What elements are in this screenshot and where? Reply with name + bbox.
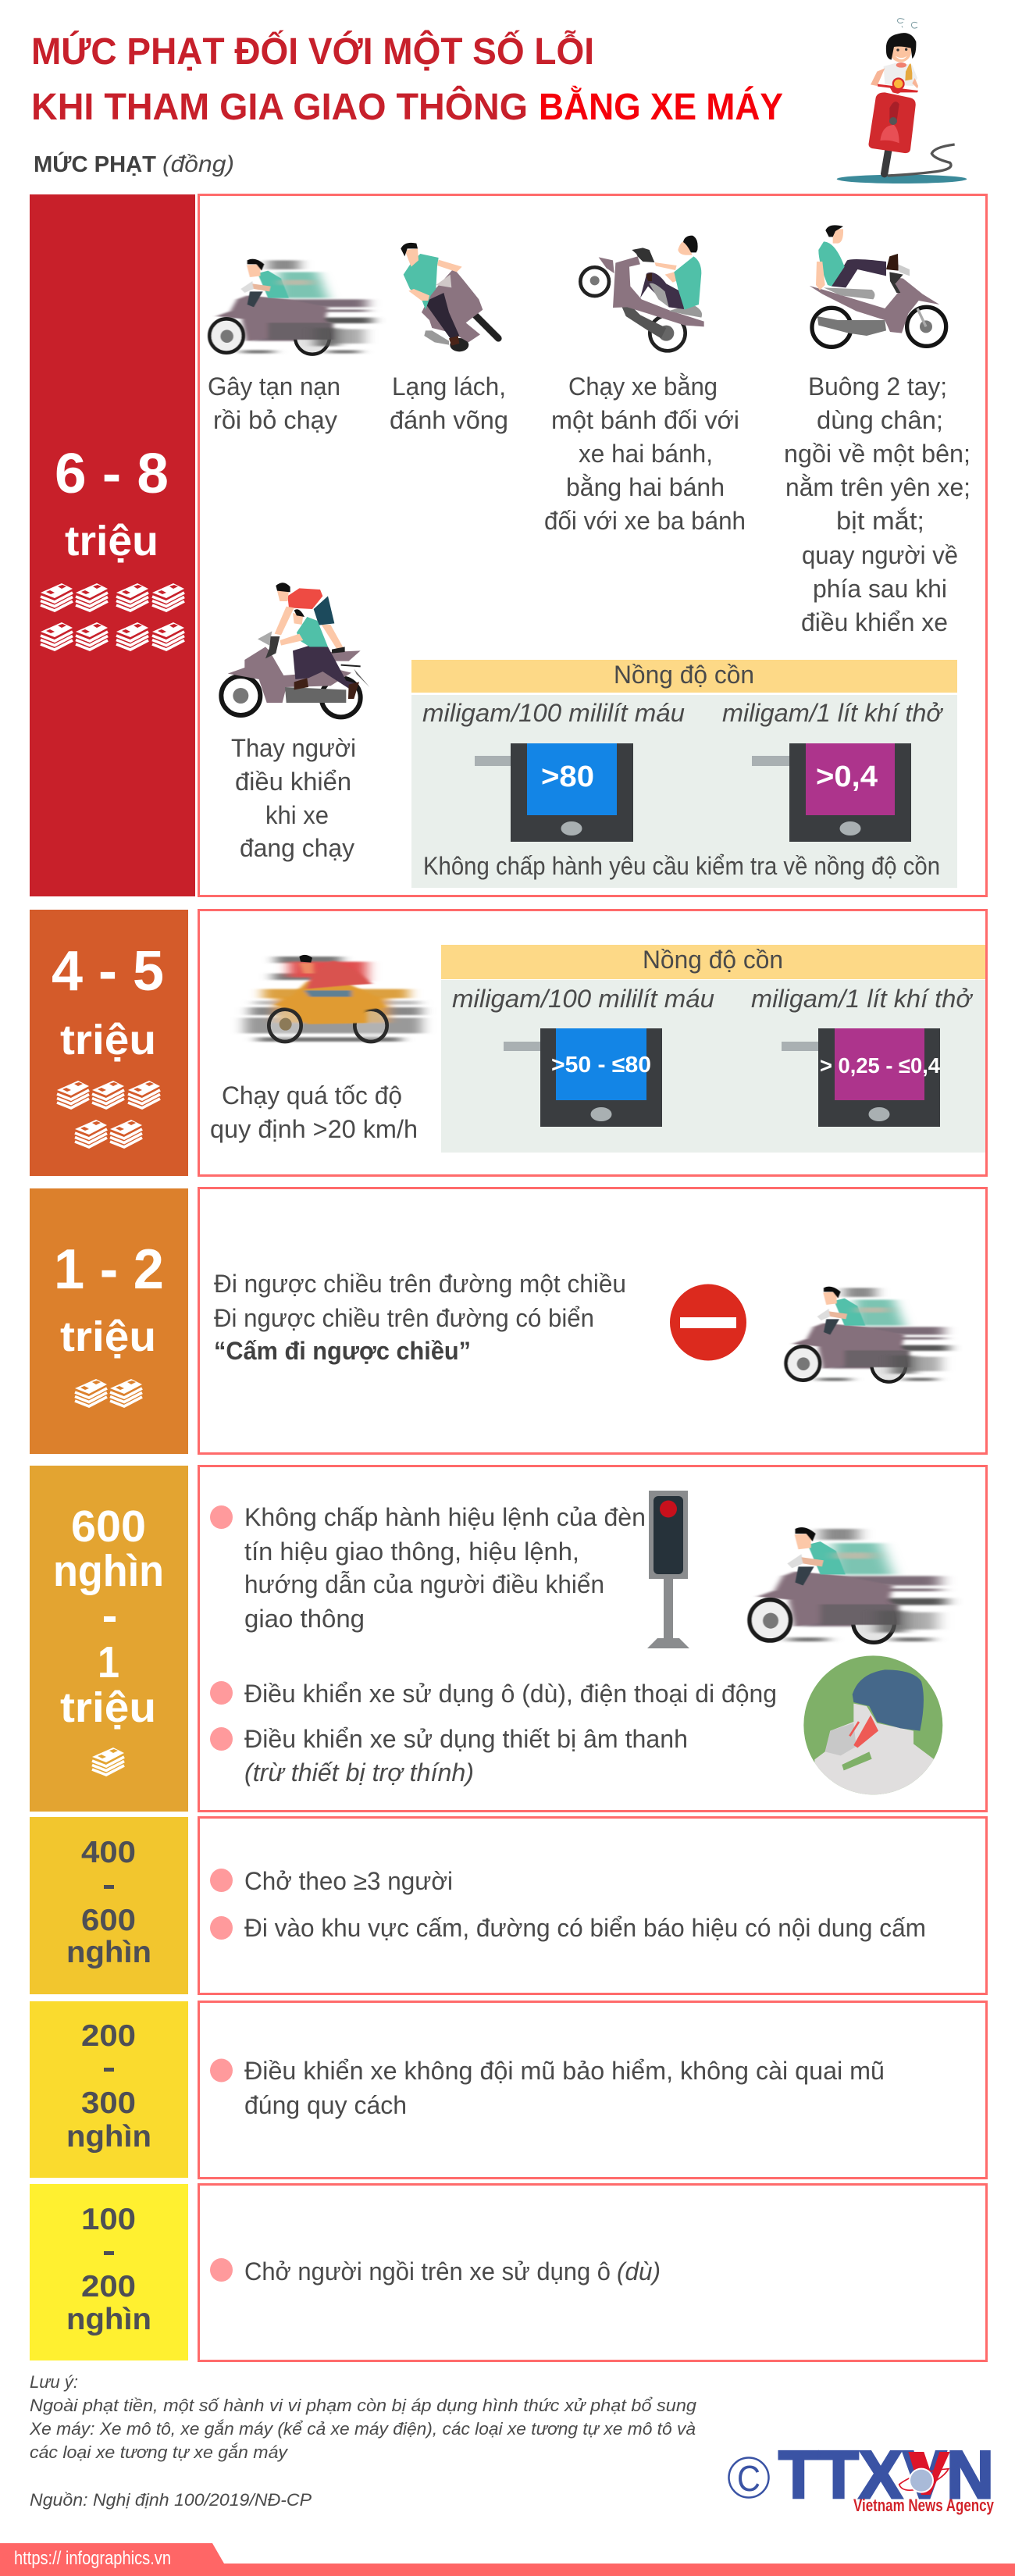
caption: swapping riders [231,734,356,862]
panel: row 7, 100-200 thousand [30,2184,987,2361]
amount box: 1 [98,1637,119,1687]
breathalyser: breath [752,743,911,842]
amount box [30,2001,188,2178]
subtitle: unit: (đồng) [162,151,234,177]
amount box: triệu [60,1313,156,1360]
text: wrong way: Đi ngược chiều trên đường một chiều [214,1270,626,1298]
amount box: nghìn [66,2303,151,2336]
icon: blurred motorbike hit and run [209,259,372,355]
icon: blurred motorbike [786,1287,949,1382]
amount box [30,1188,188,1454]
panel: alcohol levels, row 2: miligam/100 mililít máu [452,985,714,1013]
captions for violations: Chạy xe bằng [568,372,718,401]
caption: swapping riders: khi xe [265,801,329,829]
amount box: 600 [81,1904,136,1937]
amount box [30,194,195,896]
bullet text: helmet: Điều khiển xe không đội mũ bảo hiểm, không cài quai mũ [244,2057,885,2085]
caption: speeding: Chạy quá tốc độ [222,1081,402,1110]
bullet text: umbrella and phone: Điều khiển xe sử dụng ô (dù), điện thoại di động [244,1680,777,1708]
content frame [198,1818,987,1994]
captions for violations: bịt mắt; [836,507,924,535]
captions for violations: nằm trên yên xe; [785,473,970,501]
captions for violations: Lạng lách, [392,372,506,401]
bullet text: passenger with umbrella: (dù) [617,2257,661,2286]
panel: alcohol levels, row 1: miligam/1 lít khí thở [722,699,944,727]
panel: row 2, 4-5 million [30,910,987,1176]
amount box: 300 [81,2086,136,2120]
content frame [198,2002,987,2179]
amount box: nghìn [66,2120,151,2154]
breathalyser: breath: > 0,25 - ≤0,4 [820,1053,940,1078]
panel: row 3, 1-2 million [30,1188,987,1454]
panel: alcohol levels, row 2 [441,945,985,1153]
content frame [198,2185,987,2361]
title: MỨC PHẠT ĐỐI VỚI MỘT SỐ LỖI [31,30,594,73]
content frame [198,195,987,896]
title: BẰNG XE MÁY [539,86,783,128]
panel: row 6, 200-300 thousand [30,2001,987,2179]
footer bar with website [0,2543,1015,2576]
icon: rider weaving [401,243,498,351]
caption: swapping riders: đang chạy [240,834,354,862]
amount box: triệu [60,1684,156,1731]
bullet text: traffic signals: Không chấp hành hiệu lệnh của đèn [244,1503,646,1531]
notes and source: Ngoài phạt tiền, một số hành vi vi phạm còn bị áp dụng hình thức xử phạt bổ sung [30,2396,697,2415]
notes and source: Xe máy: Xe mô tô, xe gắn máy (kể cả xe máy điện), các loại xe tương tự xe mô tô và [29,2419,696,2439]
subtitle: unit: MỨC PHẠT [34,151,156,177]
amount box: 100 [81,2203,136,2236]
amount box: 600 [71,1502,146,1552]
captions for violations: điều khiển xe [801,608,948,636]
breathalyser: blood: >80 [541,761,594,793]
content frame [198,1188,987,1454]
captions for violations: Gây tạn nạn [208,372,340,401]
bullet text: helmet [210,2057,885,2119]
amount box: nghìn [66,1936,151,1969]
logo: TTXVN Vietnam News Agency: TTXVN [778,2438,994,2513]
text: wrong way: Đi ngược chiều trên đường có biển [214,1304,594,1332]
amount box: triệu [60,1017,156,1064]
icon: speeding motorbike [244,955,422,1042]
panel: alcohol levels, row 2: miligam/1 lít khí thở [751,985,974,1013]
subtitle: unit [34,151,234,177]
icon: traffic light [647,1491,689,1648]
captions for violations: một bánh đối với [551,406,739,434]
icon: blurred motorbike [750,1527,946,1642]
bullet text: audio devices [210,1725,688,1787]
panel: alcohol levels, row 2: Nồng độ cồn [643,946,783,974]
panel: alcohol levels, row 1 [411,660,957,888]
amount box: nghìn [53,1546,164,1596]
icon: no entry sign [670,1284,746,1360]
captions for violations: rồi bỏ chạy [213,406,337,434]
logo: TTXVN Vietnam News Agency: C [737,2458,760,2499]
amount box: 4 - 5 [52,940,164,1003]
text: wrong way: “Cấm đi ngược chiều” [214,1337,471,1365]
amount box [30,1466,188,1812]
captions for violations: ngồi về một bên; [784,440,970,468]
breathalyser: blood [504,1028,662,1127]
amount box [30,1817,188,1994]
icon: rider using a phone [803,1655,942,1804]
captions for violations: xe hai bánh, [579,440,713,468]
captions for violations: Buông 2 tay; [808,372,947,401]
title [31,30,783,128]
amount box: 400 [81,1836,136,1869]
panel: alcohol levels, row 1: Nồng độ cồn [614,661,754,689]
content frame [198,1466,987,1812]
footer bar with website: https:// infographics.vn [14,2548,171,2569]
amount box: 200 [81,2270,136,2303]
notes and source: các loại xe tương tự xe gắn máy [30,2442,289,2462]
caption: swapping riders: Thay người [231,734,356,762]
captions for violations [208,372,970,636]
captions for violations: phía sau khi [813,575,947,603]
bullet text: audio devices: (trừ thiết bị trợ thính) [244,1758,474,1787]
amount box: 1 - 2 [54,1238,164,1301]
bullet text: traffic signals: hướng dẫn của người điều khiển [244,1570,604,1598]
caption: speeding: quy định >20 km/h [210,1115,418,1143]
amount box [30,910,188,1176]
breathalyser: blood: >50 - ≤80 [551,1053,651,1078]
captions for violations: đối với xe ba bánh [544,507,746,535]
captions for violations: bằng hai bánh [566,473,725,501]
bullet text: audio devices: Điều khiển xe sử dụng thiết bị âm thanh [244,1725,688,1753]
bullet text: traffic signals: giao thông [244,1605,365,1633]
bullet text: passenger with umbrella: Chở người ngồi trên xe sử dụng ô [244,2257,611,2286]
amount box: 200 [81,2019,136,2053]
text: wrong way [214,1270,626,1365]
caption: speeding [210,1081,418,1143]
content frame [198,910,987,1176]
breathalyser: breath [782,1028,940,1127]
bullet text: three passengers: Chở theo ≥3 người [244,1867,453,1895]
icon: wheelie [580,236,704,351]
notes and source: Nguồn: Nghị định 100/2019/NĐ-CP [30,2490,312,2510]
amount box: 6 - 8 [55,443,169,505]
icon: riding with feet up [810,225,946,347]
bullet text: helmet: đúng quy cách [244,2091,407,2119]
notes and source [29,2372,697,2510]
panel: alcohol levels, row 1: Không chấp hành yêu cầu kiểm tra về nồng độ cồn [423,852,940,880]
amount box [30,2184,188,2360]
title: KHI THAM GIA GIAO THÔNG [31,85,528,128]
breathalyser: blood [475,743,633,842]
notes and source: Lưu ý: [30,2372,78,2392]
panel: alcohol levels, row 1: miligam/100 mililít máu [422,699,685,727]
captions for violations: dùng chân; [817,406,943,434]
panel: row 5, 400-600 thousand [30,1817,987,1994]
captions for violations: quay người về [802,541,958,569]
bullet text: restricted area: Đi vào khu vực cấm, đường có biển báo hiệu có nội dung cấm [244,1914,926,1942]
panel: row 1, 6-8 million [30,194,987,896]
breathalyser: breath: >0,4 [816,761,878,793]
bullet text: traffic signals: tín hiệu giao thông, hiệu lệnh, [244,1537,579,1566]
panel: row 4, 600 thousand to 1 million [30,1466,987,1812]
caption: swapping riders: điều khiển [235,768,351,796]
icon: drunk scooter rider [837,19,967,183]
captions for violations: đánh võng [390,406,508,434]
bullet text: traffic signals [210,1503,646,1633]
amount box: triệu [65,518,158,565]
icon: swapping riders [221,583,369,717]
